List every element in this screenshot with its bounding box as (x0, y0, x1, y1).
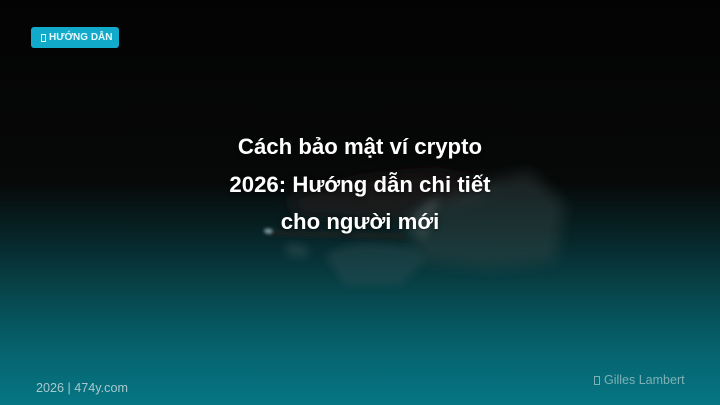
title: cho người mới (281, 209, 439, 234)
footer: year and site: 2026 | 474y.com (36, 381, 128, 395)
phone edge (264, 228, 410, 240)
title: Cách bảo mật ví crypto (238, 134, 482, 159)
title: 2026: Hướng dẫn chi tiết (229, 172, 491, 196)
author credit: Gilles Lambert (604, 373, 685, 387)
title (229, 134, 491, 234)
badge: category tag: HƯỚNG DẪN (49, 32, 112, 43)
badge: category tag (31, 27, 119, 48)
